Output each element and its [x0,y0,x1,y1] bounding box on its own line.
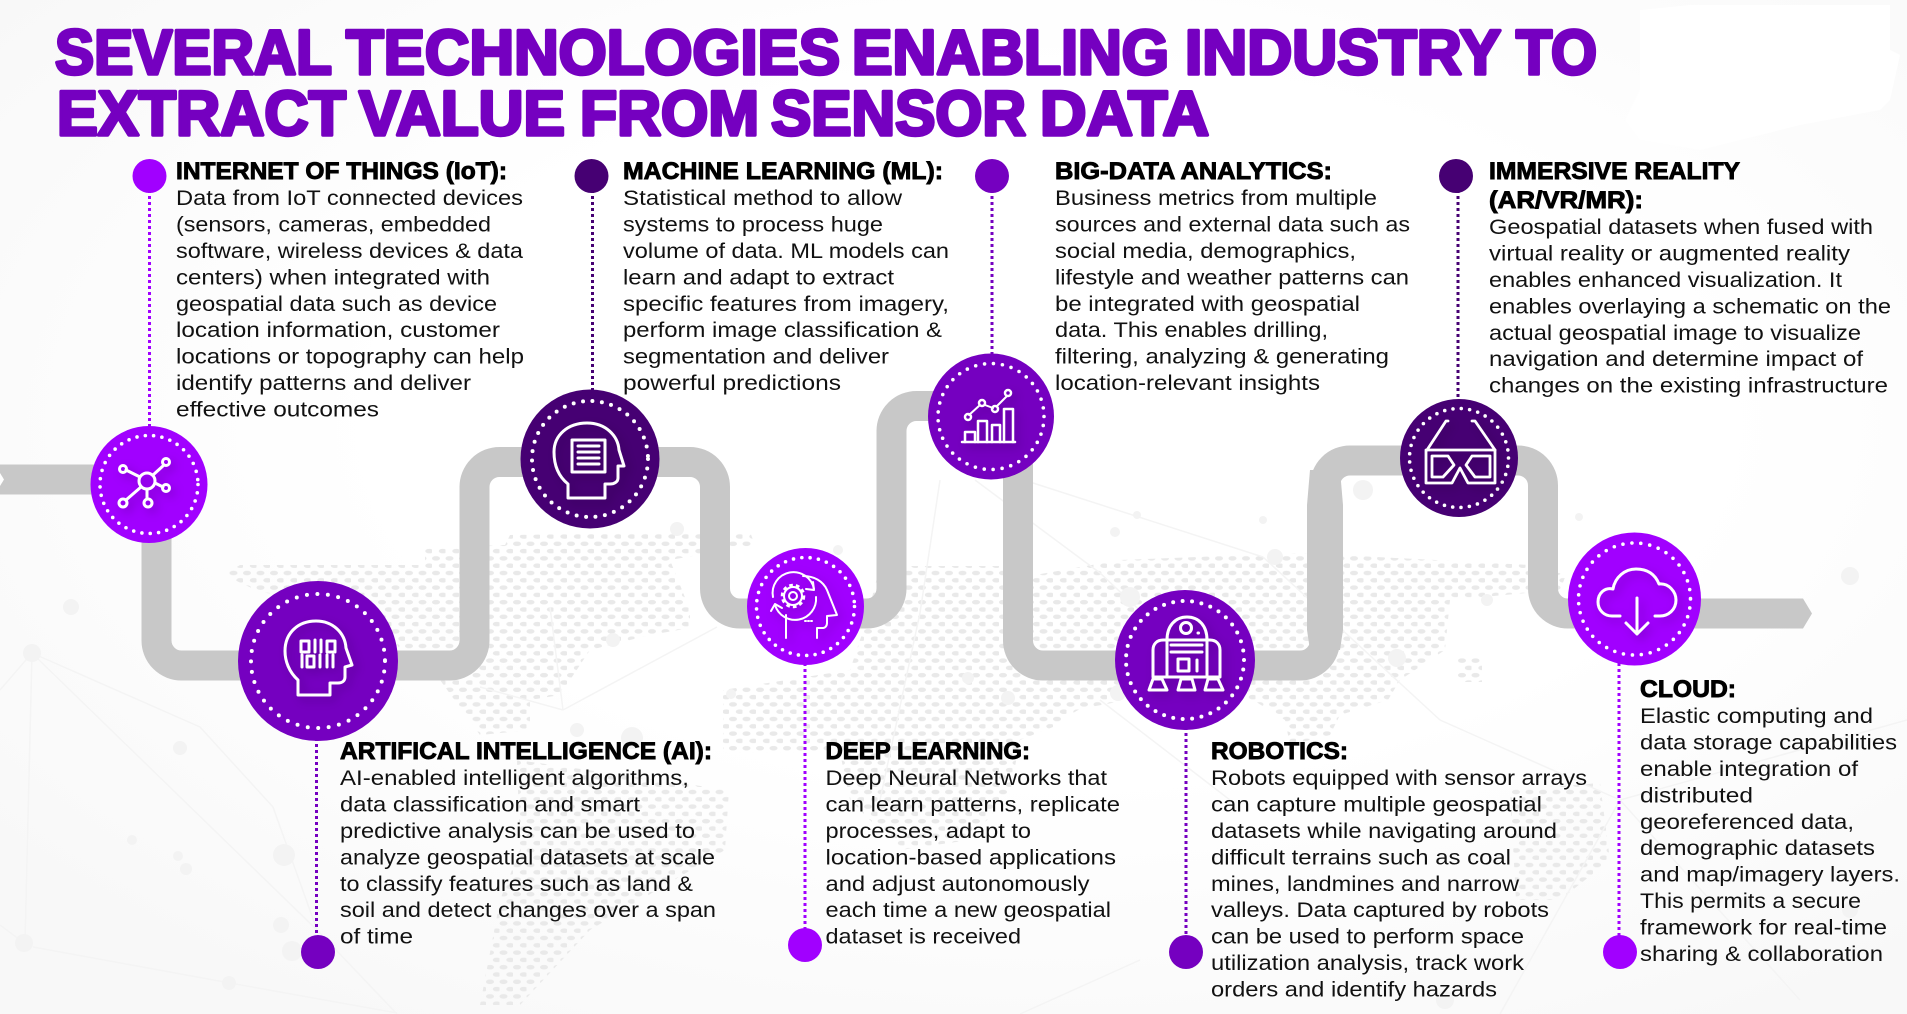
title: SENSOR [771,79,1026,149]
text block: Immersive Reality [1489,158,1891,398]
text block: Cloud: and map/imagery layers. [1640,862,1900,886]
connector: cloud [1603,663,1637,969]
text block: Internet of Things: location information, customer [176,318,500,342]
badge: AI head icon [238,581,398,741]
text block: Machine Learning: volume of data. ML models can [623,239,949,263]
text block: Big-Data Analytics: BIG-DATA ANALYTICS: [1055,158,1332,185]
text block: Immersive Reality: navigation and determine impact of [1489,347,1863,371]
text block: Deep Learning: Deep Neural Networks that [826,766,1107,790]
text block: Robotics: datasets while navigating around [1211,819,1557,843]
text block: Immersive Reality: enables overlaying a schematic on the [1489,294,1891,318]
title: TECHNOLOGIES [346,18,840,88]
text block: Machine Learning [623,158,949,395]
text block: Big-Data Analytics: data. This enables drilling, [1055,318,1328,342]
title: DATA [1040,79,1209,149]
title: SEVERAL [55,18,332,88]
text block: Deep Learning: can learn patterns, replicate [826,792,1120,816]
badge: cloud download icon [1568,532,1701,666]
text block: Deep Learning: dataset is received [826,924,1021,948]
connector: big data [975,159,1009,356]
text block: Cloud [1640,676,1900,966]
text block: Cloud: distributed [1640,784,1753,808]
text block: Robotics [1211,738,1587,1002]
text block: Artificial Intelligence: data classification and smart [340,792,640,816]
text block: Machine Learning: systems to process huge [623,212,883,236]
badge: big-data chart icon [928,354,1054,480]
title: EXTRACT [57,79,346,149]
text block: Deep Learning: DEEP LEARNING: [826,738,1030,765]
text block: Deep Learning: processes, adapt to [826,819,1031,843]
connector: IoT [132,159,166,428]
text block: Big-Data Analytics: filtering, analyzing & generating [1055,344,1389,368]
text block: Artificial Intelligence: predictive analysis can be used to [340,819,695,843]
text block: Robotics: can be used to perform space [1211,924,1524,948]
text block: Big-Data Analytics: lifestyle and weather patterns can [1055,266,1409,290]
connector: robotics [1169,727,1203,969]
badge: immersive reality glasses icon [1400,399,1518,517]
text block: Internet of Things: software, wireless devices & data [176,239,523,263]
text block: Immersive Reality: virtual reality or augmented reality [1489,242,1850,266]
badge: deep learning gear head icon [747,548,864,665]
title: FROM [580,79,759,149]
text block: Immersive Reality: changes on the existing infrastructure [1489,374,1888,398]
connector: immersive reality [1439,159,1473,402]
text block: Cloud: georeferenced data, [1640,810,1854,834]
connector: deep learning [788,663,822,962]
text block: Robotics: Robots equipped with sensor arrays [1211,766,1587,790]
text block: Internet of Things: (sensors, cameras, embedded [176,212,491,236]
text block: Immersive Reality: IMMERSIVE REALITY [1489,158,1740,185]
text block: Robotics: valleys. Data captured by robots [1211,898,1549,922]
text block: Internet of Things: locations or topography can help [176,344,524,368]
text block: Big-Data Analytics: location-relevant insights [1055,371,1320,395]
text block: Deep Learning: location-based applications [826,846,1116,870]
text block: Big-Data Analytics: be integrated with geospatial [1055,292,1360,316]
text block: Big-Data Analytics: Business metrics from multiple [1055,186,1377,210]
text block: Cloud: data storage capabilities [1640,730,1897,754]
text block: Cloud: framework for real-time [1640,916,1887,940]
badge: robotics droid icon [1115,590,1255,730]
badge: ML head and document icon [520,390,660,528]
text block: Robotics: can capture multiple geospatial [1211,792,1542,816]
text block: Artificial Intelligence: soil and detect changes over a span [340,898,716,922]
text block: Artificial Intelligence: ARTIFICAL INTELLIGENCE (AI): [340,738,712,765]
text block: Machine Learning: powerful predictions [623,371,841,395]
text block: Internet of Things: identify patterns and deliver [176,371,471,395]
winding grey road [0,406,1812,666]
title: ENABLING [852,18,1169,88]
text block: Machine Learning: specific features from imagery, [623,292,949,316]
text block: Robotics: utilization analysis, track work [1211,951,1524,975]
text block: Immersive Reality: Geospatial datasets when fused with [1489,215,1873,239]
text block: Robotics: difficult terrains such as coal [1211,846,1511,870]
text block: Deep Learning: and adjust autonomously [826,872,1090,896]
connector: AI [301,738,335,969]
text block: Internet of Things: Data from IoT connected devices [176,186,523,210]
text block: Cloud: This permits a secure [1640,889,1861,913]
text block: Big-Data Analytics [1055,158,1410,395]
text block: Deep Learning: each time a new geospatial [826,898,1111,922]
text block: Cloud: CLOUD: [1640,676,1736,703]
text block: Machine Learning: learn and adapt to extract [623,266,894,290]
text block: Deep Learning [826,738,1120,948]
text block: Machine Learning: Statistical method to allow [623,186,903,210]
text block: Artificial Intelligence: AI-enabled intelligent algorithms, [340,766,689,790]
text block: Big-Data Analytics: sources and external data such as [1055,212,1410,236]
title: TO [1516,18,1597,88]
text block: Machine Learning: MACHINE LEARNING (ML): [623,158,943,185]
text block: Internet of Things [176,158,524,422]
text block: Cloud: Elastic computing and [1640,704,1873,728]
title: INDUSTRY [1185,18,1501,88]
background [0,480,1907,1014]
text block: Machine Learning: segmentation and deliver [623,344,889,368]
text block: Internet of Things: geospatial data such as device [176,292,497,316]
text block: Immersive Reality: (AR/VR/MR): [1489,187,1643,214]
text block: Robotics: mines, landmines and narrow [1211,872,1520,896]
text block: Robotics: orders and identify hazards [1211,978,1497,1002]
text block: Internet of Things: INTERNET OF THINGS (IoT): [176,158,507,185]
text block: Machine Learning: perform image classification & [623,318,942,342]
connector: ML [574,159,608,392]
text block: Cloud: enable integration of [1640,757,1858,781]
text block: Big-Data Analytics: social media, demographics, [1055,239,1356,263]
text block: Immersive Reality: actual geospatial image to visualize [1489,321,1861,345]
text block: Artificial Intelligence: analyze geospatial datasets at scale [340,846,715,870]
text block: Immersive Reality: enables enhanced visualization. It [1489,268,1842,292]
text block: Internet of Things: centers) when integrated with [176,266,490,290]
text block: Artificial Intelligence: to classify features such as land & [340,872,693,896]
text block: Artificial Intelligence [340,738,716,948]
text block: Cloud: sharing & collaboration [1640,942,1883,966]
title: VALUE [359,79,565,149]
text block: Robotics: ROBOTICS: [1211,738,1348,765]
title [55,18,1597,149]
text block: Internet of Things: effective outcomes [176,398,379,422]
text block: Artificial Intelligence: of time [340,924,413,948]
badge: IoT network icon [90,426,208,543]
text block: Cloud: demographic datasets [1640,836,1875,860]
